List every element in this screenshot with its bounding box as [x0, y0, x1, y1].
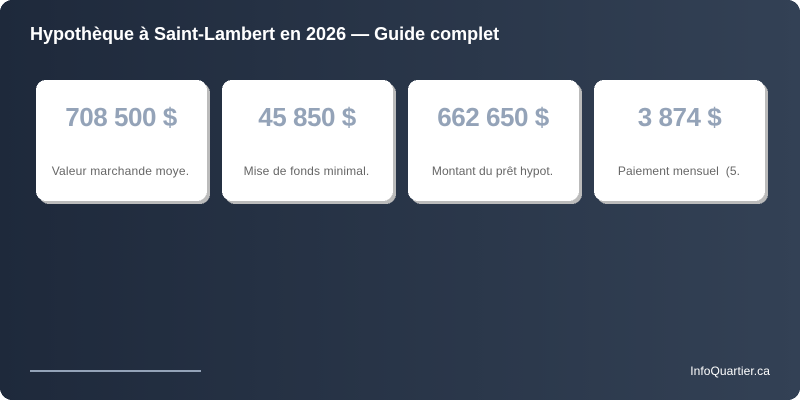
- label: valeur marchande: Valeur marchande moye.: [52, 164, 189, 178]
- value: mise de fonds: 45 850 $: [258, 102, 357, 132]
- label: paiement mensuel: Paiement mensuel (5.: [618, 164, 740, 178]
- panel: valeur marchande: [36, 80, 210, 204]
- panel: paiement mensuel: [594, 80, 768, 204]
- footer accent line: [30, 370, 201, 372]
- title: Hypothèque à Saint-Lambert en 2026 — Guide complet: [30, 24, 499, 44]
- value: paiement mensuel: 3 874 $: [638, 102, 722, 132]
- value: montant du prêt: 662 650 $: [437, 102, 550, 132]
- panel: mise de fonds: [222, 80, 396, 204]
- panel: montant du prêt: [408, 80, 582, 204]
- footer brand: InfoQuartier.ca: [690, 364, 770, 378]
- value: valeur marchande: 708 500 $: [65, 102, 178, 132]
- label: mise de fonds: Mise de fonds minimal.: [244, 164, 369, 178]
- label: montant du prêt: Montant du prêt hypot.: [432, 164, 553, 178]
